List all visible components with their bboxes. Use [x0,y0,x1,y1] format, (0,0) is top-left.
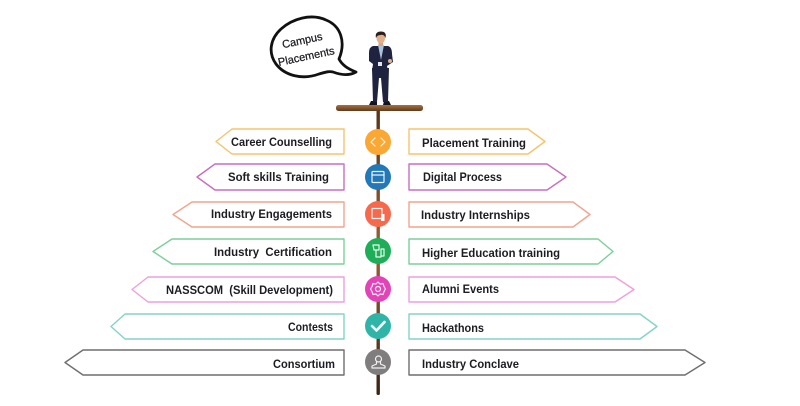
row 4 left: Industry Certification: Industry Certification [214,245,332,259]
row 5 right: Alumni Events: Alumni Events [422,282,499,296]
icon: check mark [365,313,391,339]
platform [336,105,423,111]
row 2 left: Soft skills Training: Soft skills Training [228,170,329,184]
row 4 right: Higher Education training [409,239,613,264]
row 5 left: NASSCOM (Skill Development): NASSCOM (Skill Development) [166,283,333,297]
row 6 left: Contests [111,314,344,339]
row 2 right: Digital Process: Digital Process [423,170,502,184]
row 5 right: Alumni Events [409,277,634,302]
row 1 right: Placement Training: Placement Training [422,136,526,150]
icon: gear [365,276,391,302]
speech bubble: Campus Placements: Campus [281,31,324,51]
speech bubble: Campus Placements [271,17,356,77]
speech bubble: Campus Placements: Placements [277,45,336,69]
icon: code brackets [365,129,391,155]
row 1 right: Placement Training [409,129,545,154]
row 7 left: Consortium: Consortium [273,357,335,371]
row 3 left: Industry Engagements: Industry Engagements [211,207,332,221]
central pole [376,110,380,395]
row 7 right: Industry Conclave [409,350,705,375]
row 3 right: Industry Internships [409,202,590,227]
row 7 left: Consortium [65,350,344,375]
row 3 right: Industry Internships: Industry Internships [421,208,530,222]
row 6 right: Hackathons [409,314,657,339]
row 3 left: Industry Engagements [173,202,344,227]
row 2 right: Digital Process [409,164,566,190]
icon: internship badge [365,201,391,227]
icon: certification [365,238,391,264]
row 4 right: Higher Education training: Higher Education training [422,246,560,260]
row 6 left: Contests: Contests [288,320,333,334]
row 1 left: Career Counselling [216,129,344,154]
row 6 right: Hackathons: Hackathons [422,321,484,335]
row 4 left: Industry Certification [153,239,344,264]
row 1 left: Career Counselling: Career Counselling [231,135,332,149]
row 5 left: NASSCOM (Skill Development) [132,277,344,302]
businessman figure [369,32,393,105]
row 7 right: Industry Conclave: Industry Conclave [422,357,519,371]
icon: person [365,349,391,375]
row 2 left: Soft skills Training [197,164,344,190]
icon: browser window [365,164,391,190]
